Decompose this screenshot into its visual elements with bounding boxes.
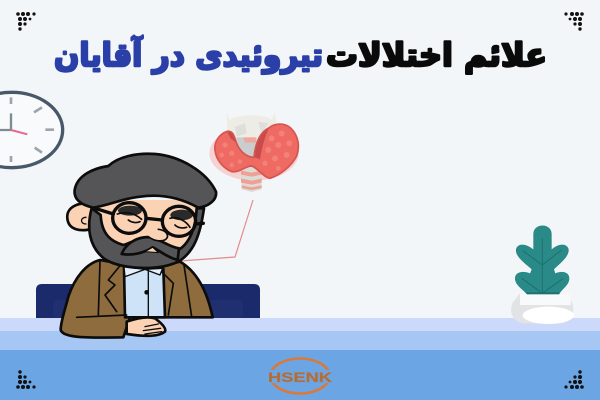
nose [148,225,168,240]
leaves [515,225,569,294]
hair [75,154,216,208]
thyroid lobes [215,124,298,178]
title [54,35,547,74]
dots: bottom left [16,370,36,389]
thyroid illustration [209,112,299,192]
moustache [122,237,179,260]
halo [209,126,299,181]
hand [127,317,165,336]
larynx [227,112,277,142]
chair [36,284,260,318]
face [93,200,200,260]
ear [67,204,93,230]
mouth [145,247,158,253]
table [0,318,600,400]
icon: wall clock [0,92,63,168]
logo: HSENK: HSENK [268,369,332,385]
logo: HSENK [266,358,334,394]
beard [89,208,204,268]
dots: bottom right [564,370,584,389]
plant [511,225,574,324]
title: blue part: تیروئیدی در آقایان [54,35,323,74]
logo ring [270,358,330,394]
glasses [95,203,203,236]
eyes [118,206,142,216]
dots: top right [564,12,584,31]
lapels [77,262,192,317]
trachea [241,165,262,192]
pot [511,293,573,323]
dots: top left [16,12,36,31]
title: black part: علائم اختلالات [326,36,547,74]
shirt [124,267,165,317]
pointer line [180,200,253,261]
jacket [61,260,213,338]
man character [61,154,216,338]
